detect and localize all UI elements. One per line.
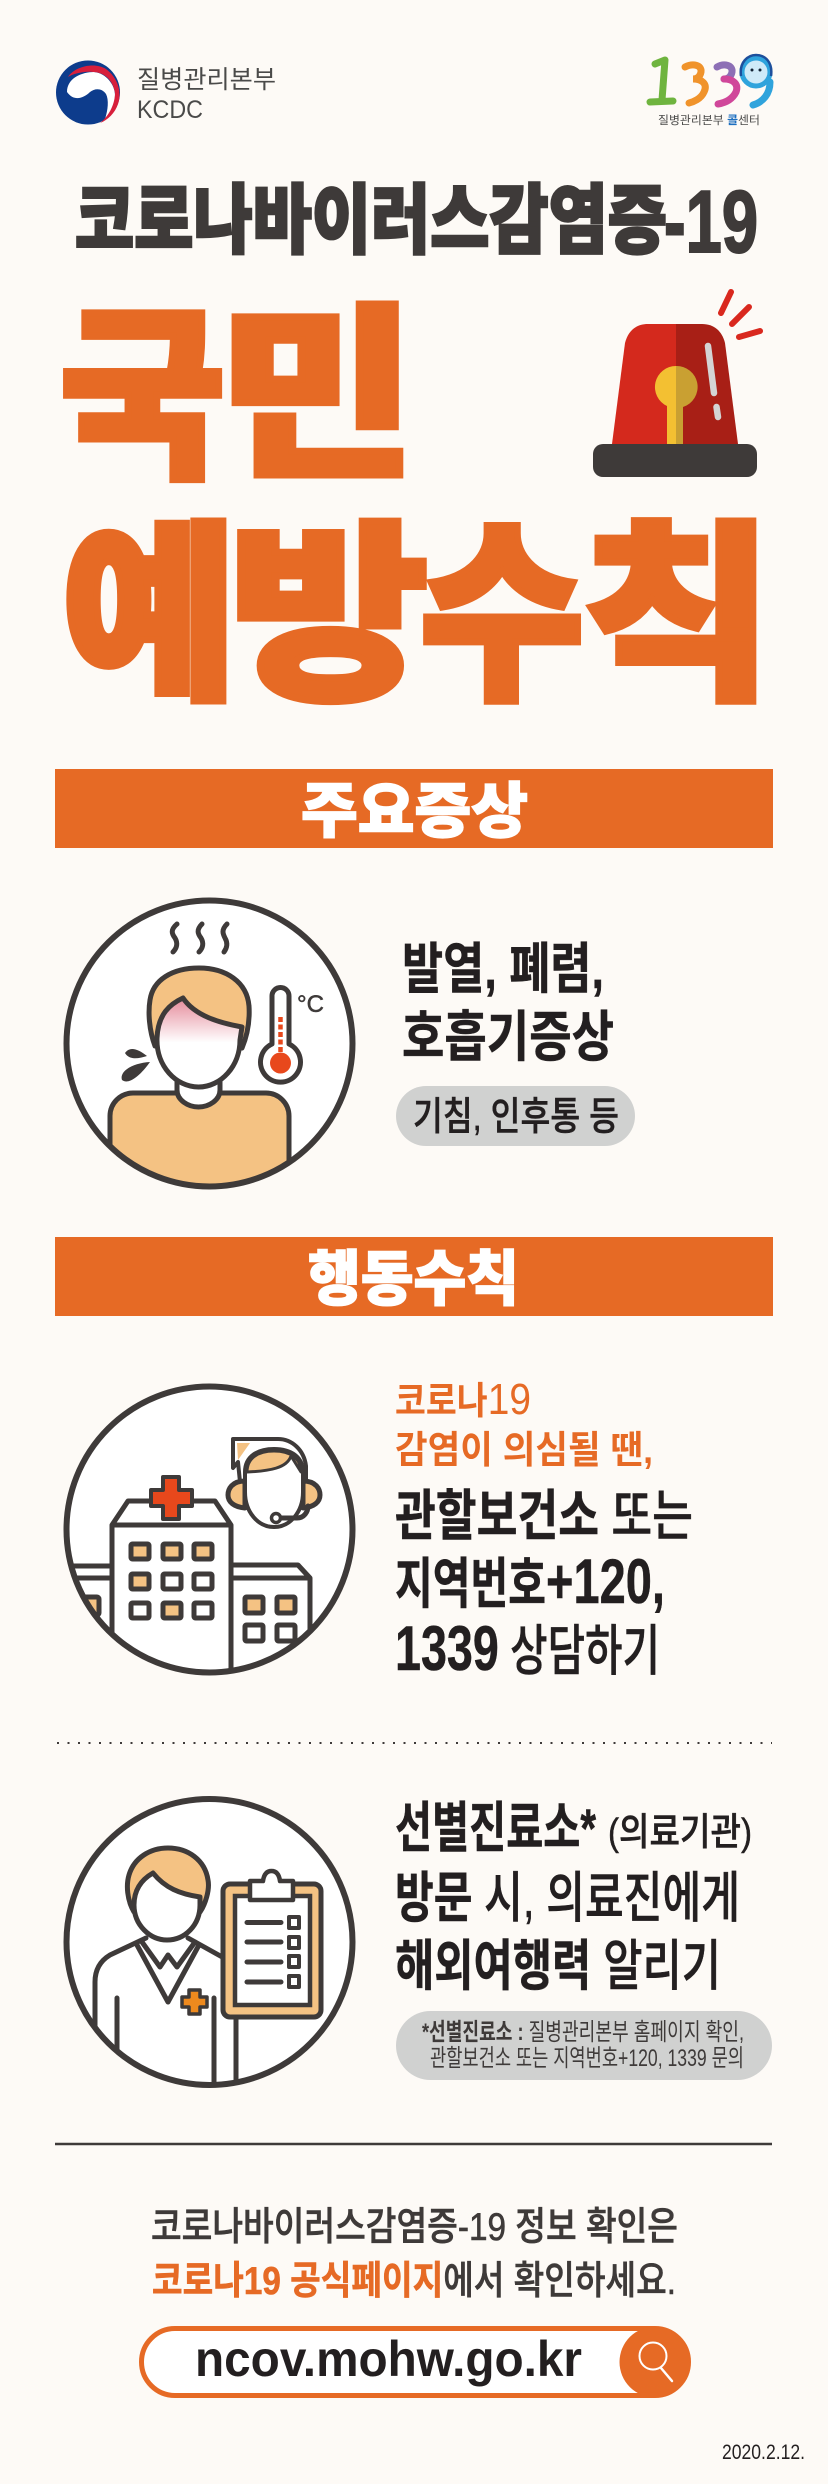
symptom text (402, 938, 614, 1068)
icon: siren (593, 292, 760, 477)
siren rays (721, 292, 760, 337)
info text: 코로나바이러스감염증-19 정보 확인은 (151, 2206, 678, 2249)
hair (149, 968, 249, 1048)
doctor coat (92, 1936, 220, 2026)
footnote pill: *선별진료소 : 질병관리본부 홈페이지 확인, (422, 2019, 744, 2046)
clinic text: (의료기관) (608, 1812, 752, 1854)
badge cross (182, 1990, 207, 2014)
digit 3 pink (718, 79, 737, 104)
coat lines (117, 1998, 236, 2090)
dotted divider (57, 1742, 772, 1744)
panel: call consultation (64, 1382, 692, 1676)
action text: 관할보건소 또는 (395, 1485, 693, 1547)
clinic text: 선별진료소* (395, 1797, 596, 1859)
title: disease name: -19 (664, 172, 758, 271)
siren highlights (708, 346, 718, 417)
headline: 예방수칙: 예 (62, 509, 237, 724)
degree label: °C (297, 991, 324, 1018)
info text (151, 2206, 678, 2303)
circle outline (66, 1799, 352, 2085)
checklist boxes (289, 1917, 299, 1987)
section header: 행동수칙: 행동수칙 (308, 1246, 519, 1313)
checklist lines (247, 1922, 281, 1982)
sneeze drops (122, 1049, 150, 1081)
circle outline (66, 1386, 352, 1672)
thermometer (260, 988, 300, 1082)
hospital (110, 1498, 234, 1632)
panel: screening clinic (66, 1797, 772, 2100)
organisation acronym: KCDC (137, 96, 203, 124)
neck (177, 1078, 220, 1107)
headline: 예방수칙: 칙 (583, 509, 773, 724)
siren dome left (612, 324, 676, 444)
left building (74, 1564, 110, 1580)
steam (172, 924, 227, 952)
title: disease name: 코로나바이러스감염증 (75, 179, 667, 264)
footnote pill (396, 2011, 772, 2080)
clinic text: 해외여행력 알리기 (395, 1935, 721, 1997)
search bar (142, 2326, 690, 2398)
section header: 주요증상: 주요증상 (301, 778, 528, 845)
section header: 주요증상 (55, 769, 773, 848)
info text: 코로나19 공식페이지에서 확인하세요. (152, 2260, 676, 2303)
action text (395, 1485, 693, 1684)
agent hair (247, 1451, 301, 1472)
hospital cross (151, 1477, 192, 1519)
face (157, 998, 242, 1087)
digit 9 with face (741, 55, 771, 105)
icon: taegeuk emblem (56, 60, 120, 124)
panel: symptoms (66, 900, 635, 1223)
icon: doctor with clipboard (66, 1799, 352, 2100)
logo: KCDC (56, 60, 276, 124)
orange condition text: 감염이 의심될 땐, (395, 1430, 653, 1472)
icon: hospital and call agent (64, 1384, 356, 1676)
right building (234, 1562, 312, 1630)
url: ncov.mohw.go.kr (195, 2331, 582, 2387)
symptom text: 발열, 폐렴, (402, 938, 604, 1000)
digit 3 orange (685, 65, 705, 103)
digit 3 purple (717, 65, 732, 79)
right building windows (245, 1597, 295, 1641)
orange condition text: 코로나19 (395, 1375, 531, 1424)
headset arm and mic (281, 1506, 308, 1518)
hair (127, 1848, 208, 1912)
ear cups (228, 1481, 320, 1508)
icon: feverish person (66, 900, 352, 1223)
headline: 국민: 민 (218, 294, 416, 500)
face (134, 1873, 200, 1940)
symptom text: 호흡기증상 (402, 1006, 614, 1068)
head (245, 1449, 303, 1527)
symptom pill (396, 1086, 635, 1146)
clip (250, 1871, 293, 1900)
back hair (233, 1439, 306, 1482)
action text: 지역번호+120, (395, 1547, 665, 1617)
clinic text (395, 1797, 752, 1997)
orange condition text (395, 1375, 653, 1472)
hospital windows (131, 1544, 212, 1618)
siren base (593, 444, 757, 477)
digit 1 (650, 60, 673, 102)
search button (620, 2326, 690, 2398)
headline: 예방수칙: 방 (229, 509, 428, 724)
symptom pill: 기침, 인후통 등 (413, 1096, 619, 1139)
body (108, 1090, 292, 1184)
organisation name: 질병관리본부 (137, 66, 276, 94)
date: 2020.2.12. (722, 2441, 805, 2464)
call centre caption: 질병관리본부 콜센터 (658, 114, 760, 127)
siren dome right (676, 324, 738, 444)
circle outline (66, 900, 352, 1186)
action text: 1339 상담하기 (395, 1614, 660, 1684)
headline: 국민: 국 (60, 296, 225, 502)
divider line (55, 2143, 772, 2145)
headline: 국민 (60, 294, 416, 502)
clipboard (223, 1871, 321, 2017)
call agent (228, 1439, 320, 1527)
logo: 1339 call centre (650, 55, 771, 127)
siren lamp (655, 366, 698, 444)
section header: 행동수칙 (55, 1237, 773, 1316)
headline: 예방수칙: 수 (420, 509, 584, 724)
clinic text: 방문 시, 의료진에게 (395, 1867, 740, 1929)
collar (137, 1942, 199, 2002)
headline: 예방수칙 (62, 509, 773, 724)
